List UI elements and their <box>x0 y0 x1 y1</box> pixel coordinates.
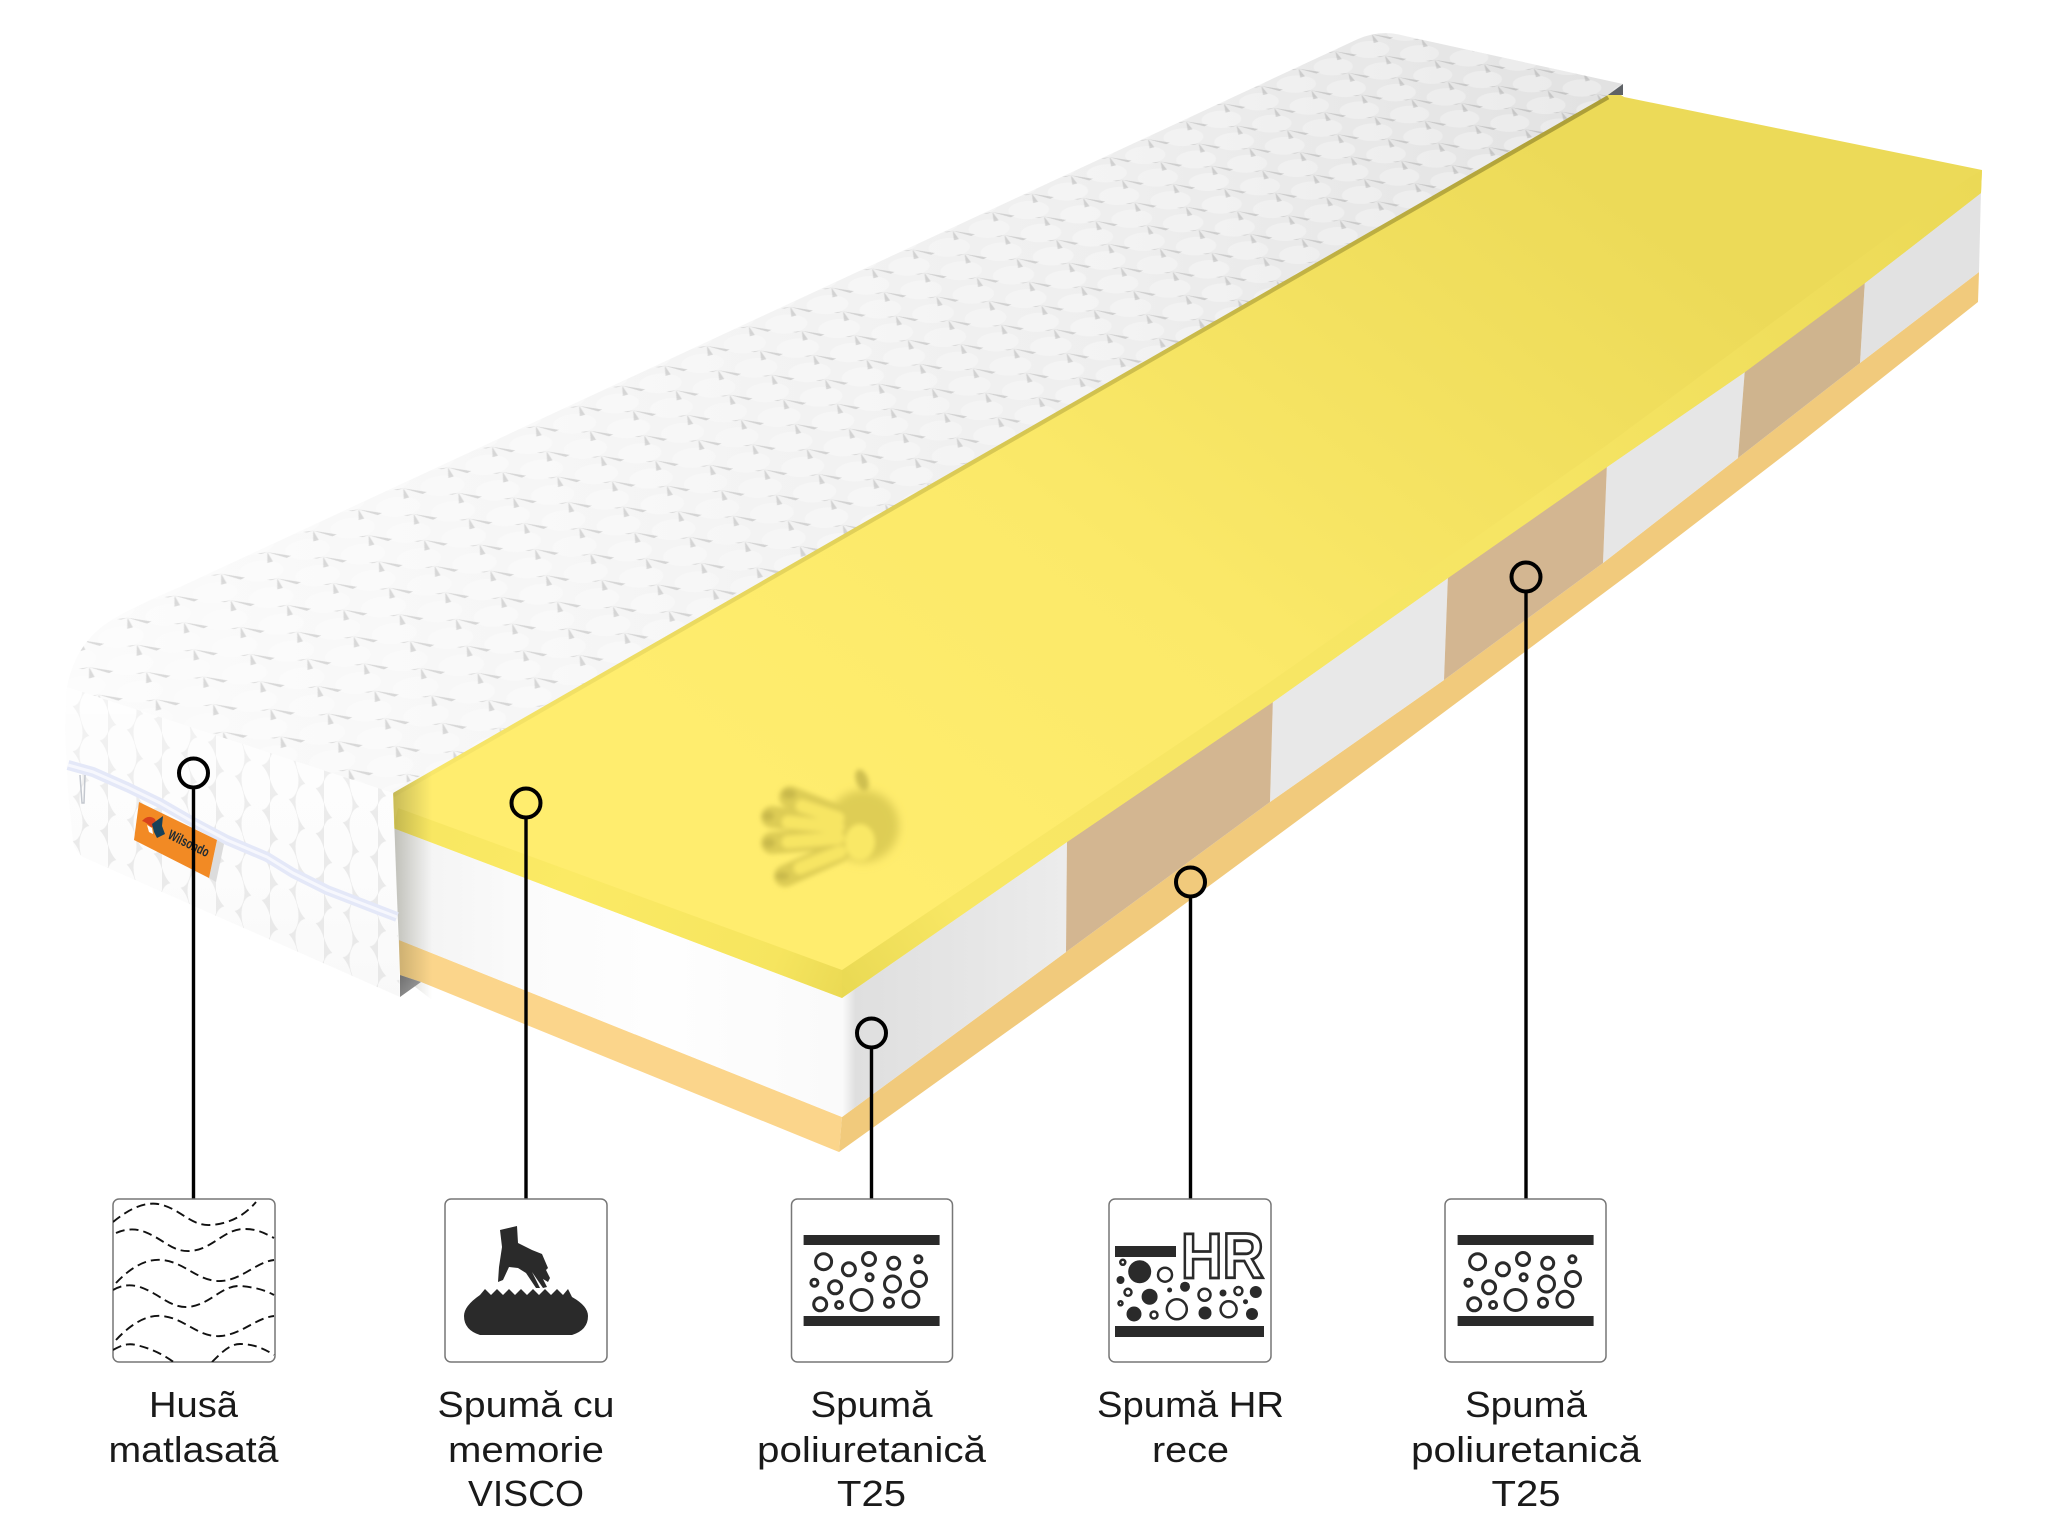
icon: hand on memory foam <box>445 1199 607 1362</box>
label: polyurethane T25 <box>757 1384 987 1514</box>
label: HR cold foam: rece <box>1152 1429 1229 1470</box>
label: quilted cover <box>108 1384 279 1470</box>
layer: HR foam segments <box>1066 279 1865 952</box>
label: visco memory foam: memorie <box>448 1429 604 1470</box>
cover far-end gap <box>1608 84 1623 95</box>
callout: T25 pointer one <box>857 1018 886 1199</box>
callout: cover pointer <box>179 758 208 1199</box>
hand imprint <box>762 768 899 880</box>
icon: HR cold foam <box>1109 1199 1271 1362</box>
cover front face <box>65 687 400 997</box>
label: HR cold foam <box>1097 1384 1284 1470</box>
label: visco memory foam: Spumă cu <box>438 1384 614 1425</box>
layer: white T25 foam <box>393 189 1981 1117</box>
label: polyurethane T25: T25 <box>837 1473 906 1514</box>
foam block <box>464 1289 588 1335</box>
icon: polyurethane foam T25 <box>792 1199 952 1362</box>
layer: bottom orange foam <box>399 272 1979 1152</box>
label: polyurethane T25: poliuretanică <box>757 1429 987 1470</box>
cover top face <box>79 33 1622 793</box>
brand tag: Wilsondo <box>166 826 212 860</box>
icon: quilted cover waves <box>113 1199 275 1364</box>
callout: T25 pointer two <box>1512 562 1540 1199</box>
hand <box>498 1226 550 1288</box>
callout: visco pointer <box>512 788 540 1199</box>
label: quilted cover: Husã <box>149 1384 239 1425</box>
label: polyurethane T25 second <box>1411 1384 1642 1514</box>
shadow cast by the cover on the foam stack <box>393 768 432 1000</box>
label: polyurethane T25 second: poliuretanică <box>1411 1429 1642 1470</box>
icon: polyurethane foam T25 second <box>1445 1199 1606 1362</box>
callout: HR pointer <box>1176 868 1205 1199</box>
brand logo <box>142 816 165 838</box>
shadow along cover cut <box>393 97 1608 795</box>
label: polyurethane T25: Spumă <box>810 1384 933 1425</box>
layer: yellow memory foam <box>392 88 1982 998</box>
label: polyurethane T25 second: T25 <box>1492 1473 1560 1514</box>
label: HR cold foam: Spumă HR <box>1097 1384 1284 1425</box>
label: polyurethane T25 second: Spumă <box>1465 1384 1588 1425</box>
label: visco memory foam: VISCO <box>468 1473 584 1514</box>
cover fold shadow <box>400 975 421 997</box>
brand tag <box>134 802 224 882</box>
cover front, callouts, icons and labels <box>66 84 1641 1506</box>
zipper <box>68 765 397 917</box>
label: visco memory foam <box>438 1384 614 1514</box>
label: quilted cover: matlasatã <box>108 1429 279 1470</box>
icon: HR cold foam: HR <box>1181 1220 1264 1292</box>
